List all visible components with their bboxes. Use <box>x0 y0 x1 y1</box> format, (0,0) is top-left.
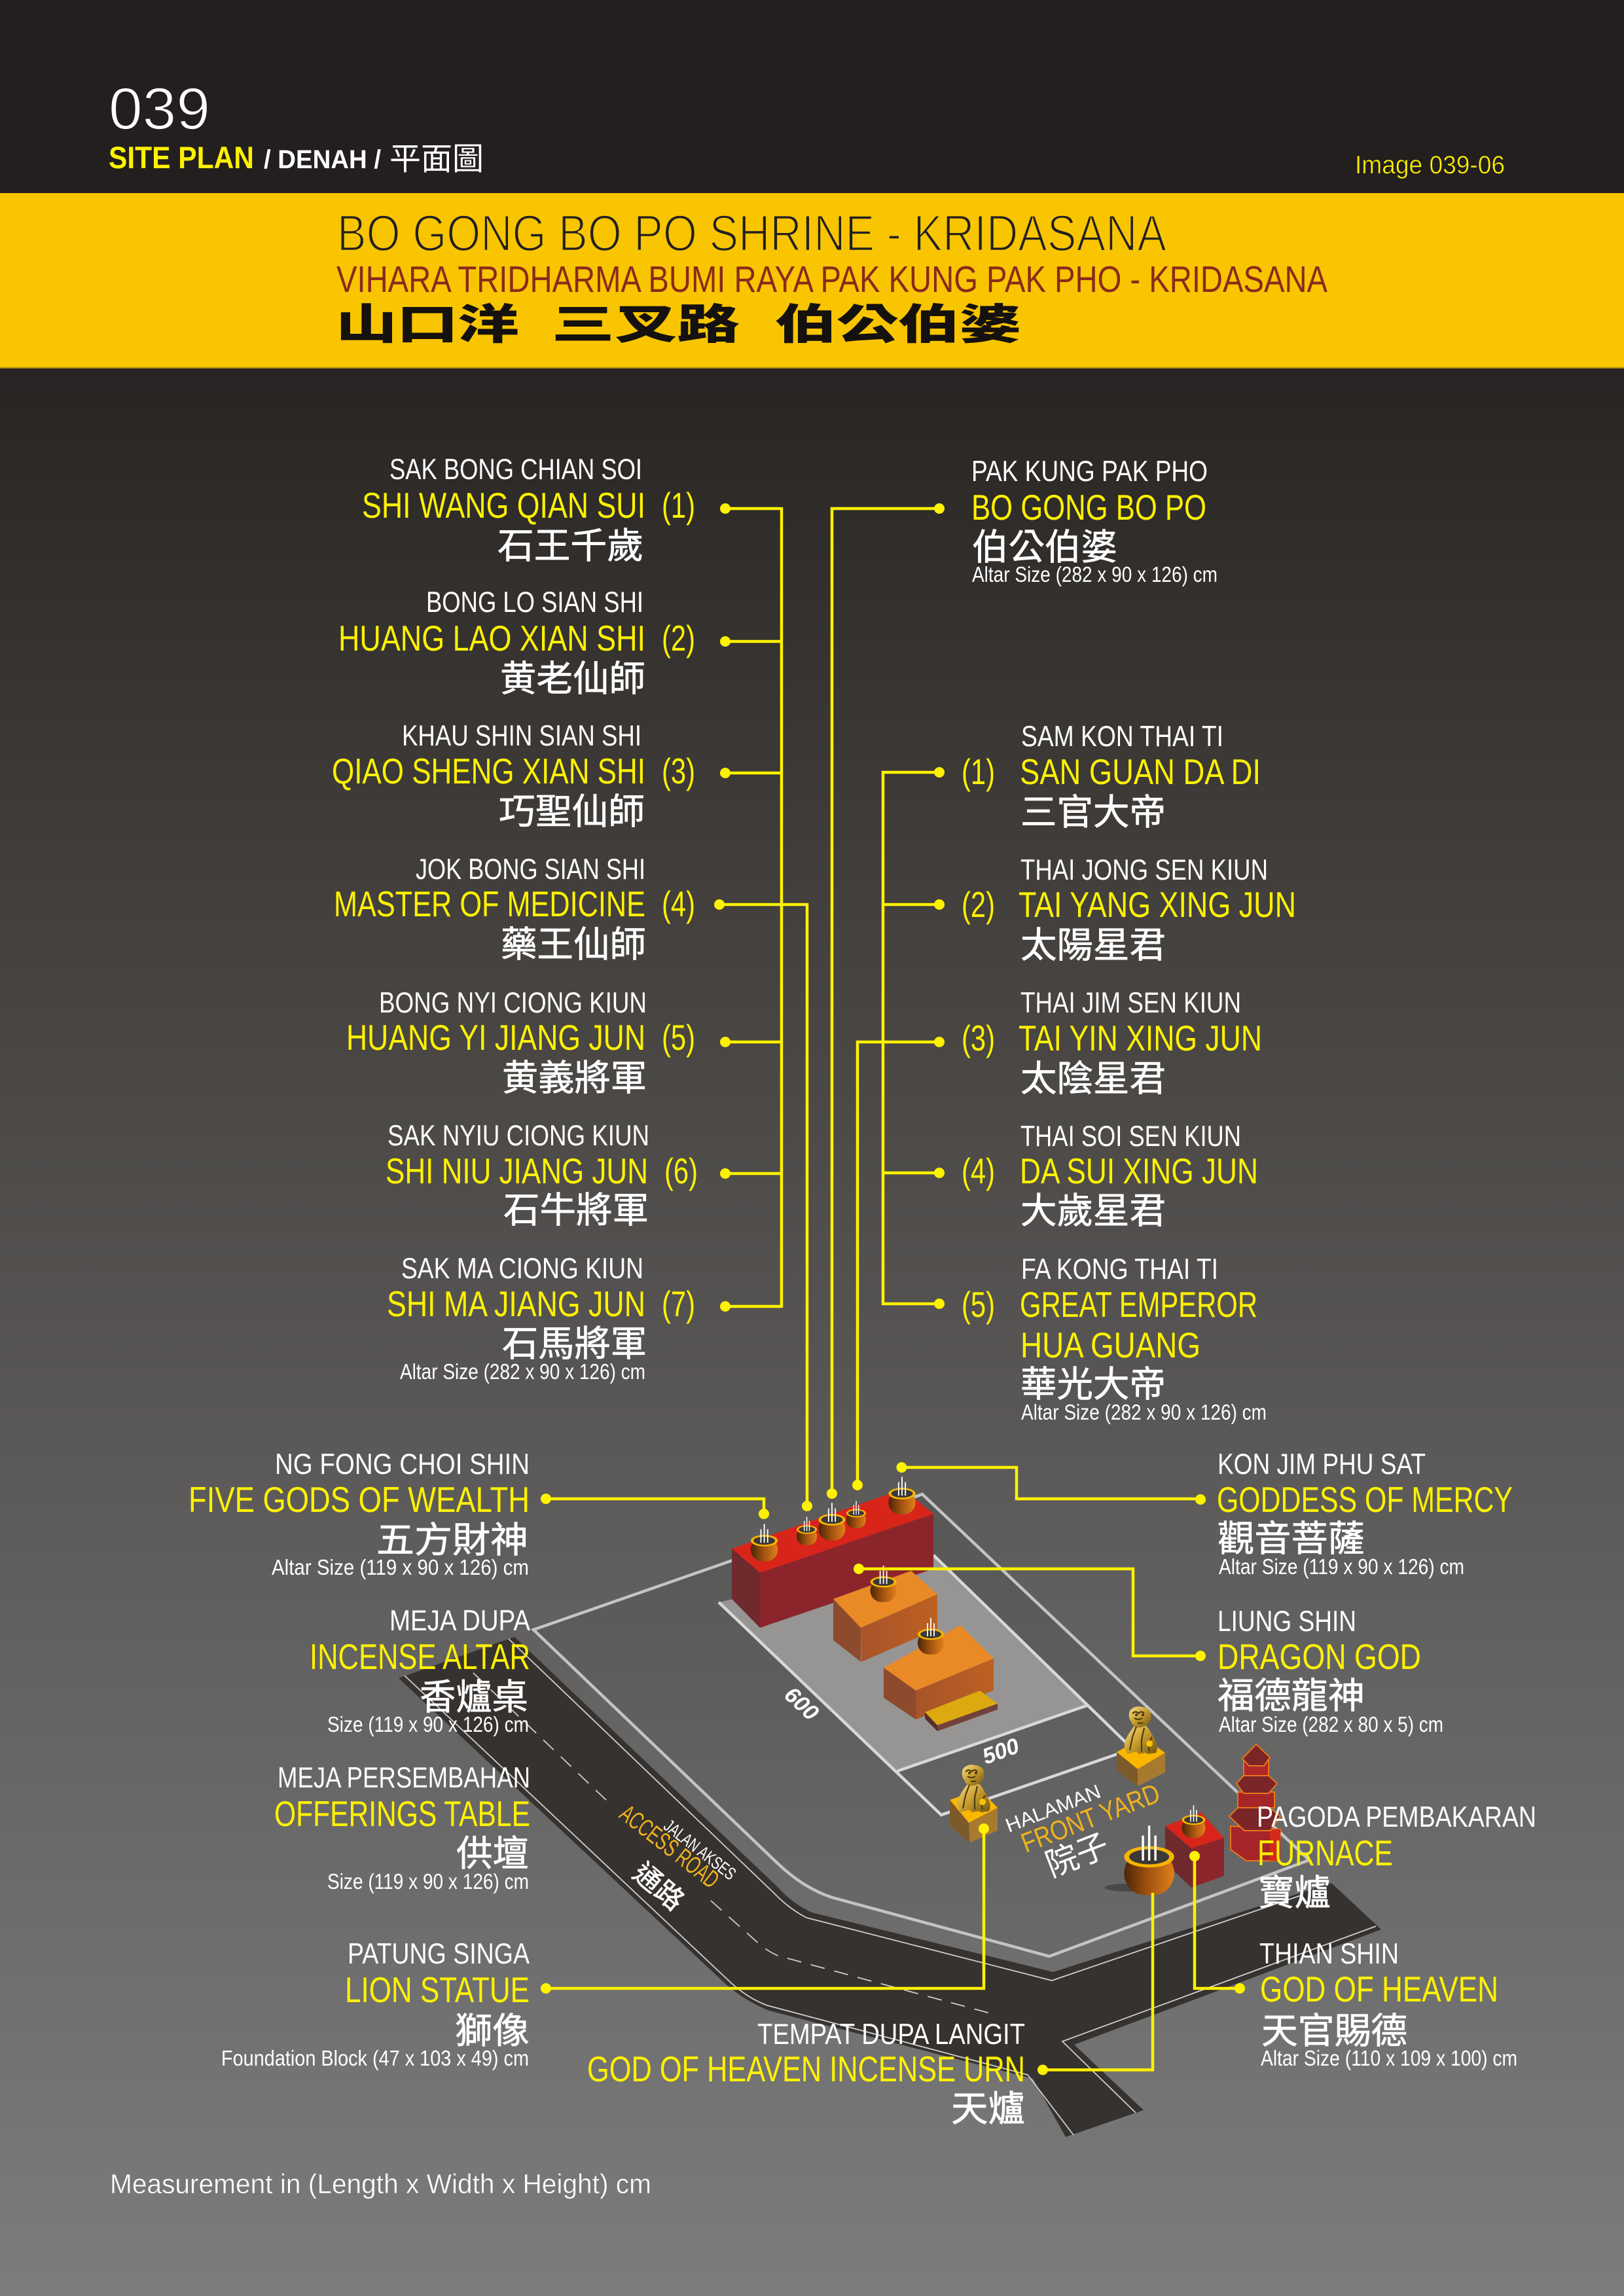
label: tai yin xing jun: TAI YIN XING JUN <box>1019 1018 1262 1058</box>
label: qiao sheng xian shi: QIAO SHENG XIAN SHI <box>332 751 645 791</box>
label: qiao sheng xian shi: KHAU SHIN SIAN SHI <box>402 720 641 752</box>
label: dragon god: DRAGON GOD <box>1218 1636 1421 1677</box>
label: huang yi jiang jun: (5) <box>662 1017 695 1058</box>
label: great emperor hua guang: (5) <box>962 1284 995 1325</box>
label: dragon god: Altar Size (282 x 80 x 5) cm <box>1219 1712 1443 1736</box>
access road <box>399 1637 1381 2137</box>
road labels: JALAN AKSES <box>660 1816 740 1884</box>
label: tai yang xing jun: (2) <box>962 884 995 925</box>
label: shi ma jiang jun: 石馬將軍 <box>502 1323 647 1364</box>
label: offerings table <box>274 1762 530 1893</box>
indonesian title: VIHARA TRIDHARMA BUMI RAYA PAK KUNG PAK PHO - KRIDASANA <box>336 259 1327 300</box>
label: shi ma jiang jun: SAK MA CIONG KIUN <box>401 1253 643 1285</box>
label: huang lao xian shi <box>338 586 695 699</box>
label: san guan da di: 三官大帝 <box>1020 792 1166 833</box>
lion statue left <box>950 1765 998 1842</box>
label: qiao sheng xian shi: (3) <box>662 751 695 791</box>
label: incense altar: Size (119 x 90 x 126) cm <box>327 1712 529 1736</box>
front yard label: FRONT YARD <box>1017 1778 1164 1858</box>
label: da sui xing jun: 大歲星君 <box>1020 1191 1166 1231</box>
god of heaven altar <box>1165 1805 1224 1888</box>
label: master of medicine: JOK BONG SIAN SHI <box>416 853 645 886</box>
label: shi ma jiang jun <box>387 1253 695 1384</box>
label: offerings table: 供壇 <box>456 1833 529 1874</box>
label: god of heaven <box>1259 1938 1517 2070</box>
label: qiao sheng xian shi <box>332 720 695 832</box>
label: god of heaven: GOD OF HEAVEN <box>1260 1969 1498 2009</box>
label: master of medicine <box>334 853 695 965</box>
shrine ground plate <box>533 1494 1309 1956</box>
label: tai yin xing jun: 太陰星君 <box>1020 1058 1166 1099</box>
measurement note: Measurement in (Length x Width x Height) cm <box>110 2168 651 2199</box>
chinese title <box>336 301 1021 348</box>
label: da sui xing jun <box>962 1121 1258 1231</box>
label: shi wang qian sui: SHI WANG QIAN SUI <box>362 485 645 526</box>
label: lion statue <box>221 1938 530 2070</box>
label: god of heaven: Altar Size (110 x 109 x 100) cm <box>1261 2046 1517 2070</box>
label: great emperor hua guang: GREAT EMPEROR <box>1020 1284 1257 1325</box>
incense altar <box>833 1566 937 1662</box>
label: offerings table: MEJA PERSEMBAHAN <box>278 1762 530 1794</box>
label: shi niu jiang jun: SHI NIU JIANG JUN <box>386 1151 648 1191</box>
inner hall floor <box>719 1555 1089 1771</box>
label: goddess of mercy <box>1217 1448 1513 1579</box>
label: incense altar <box>310 1605 530 1736</box>
road labels: ACCESS ROAD <box>614 1800 724 1894</box>
label: tai yang xing jun: THAI JONG SEN KIUN <box>1020 854 1268 886</box>
label: furnace: 寶爐 <box>1258 1873 1331 1913</box>
label: tai yang xing jun <box>962 854 1296 965</box>
pagoda furnace <box>1229 1744 1280 1861</box>
label: tai yang xing jun: 太陽星君 <box>1020 925 1166 965</box>
front yard label <box>1003 1778 1164 1884</box>
label: five gods of wealth: FIVE GODS OF WEALTH <box>189 1479 530 1520</box>
label: master of medicine: 藥王仙師 <box>501 924 646 965</box>
label: shi niu jiang jun: 石牛將軍 <box>503 1190 649 1230</box>
label: five gods of wealth: NG FONG CHOI SHIN <box>275 1448 530 1480</box>
label: qiao sheng xian shi: 巧聖仙師 <box>499 791 645 832</box>
chinese title: 山口洋 <box>336 301 519 348</box>
label: shi wang qian sui: (1) <box>662 485 695 526</box>
section title: 平面圖 <box>389 142 484 177</box>
label: god of heaven: THIAN SHIN <box>1259 1938 1399 1970</box>
altar urns <box>751 1477 916 1562</box>
label: great emperor hua guang: 華光大帝 <box>1020 1364 1166 1405</box>
label: offerings table: Size (119 x 90 x 126) cm <box>327 1869 529 1893</box>
label: huang lao xian shi: 黄老仙師 <box>500 658 645 699</box>
label: san guan da di: SAN GUAN DA DI <box>1020 751 1261 792</box>
label: tai yin xing jun: THAI JIM SEN KIUN <box>1020 987 1241 1019</box>
label: da sui xing jun: DA SUI XING JUN <box>1020 1151 1258 1191</box>
label: shi wang qian sui: 石王千歲 <box>497 526 643 566</box>
dimension labels: 500 <box>979 1733 1022 1770</box>
label: great emperor hua guang <box>962 1253 1267 1424</box>
label: god of heaven incense urn: TEMPAT DUPA LANGIT <box>757 2018 1025 2051</box>
label: furnace <box>1257 1801 1536 1913</box>
label: san guan da di: (1) <box>962 751 995 792</box>
road labels: 通路 <box>627 1857 690 1916</box>
label: master of medicine: (4) <box>662 884 695 924</box>
label: dragon god: 福德龍神 <box>1218 1676 1365 1716</box>
main red altar <box>732 1477 933 1628</box>
section title: SITE PLAN <box>109 140 254 175</box>
label: shi niu jiang jun: SAK NYIU CIONG KIUN <box>388 1120 649 1152</box>
label: great emperor hua guang: Altar Size (282 x 90 x 126) cm <box>1021 1400 1267 1424</box>
dimension labels: 600 <box>780 1682 823 1726</box>
chinese title: 伯公伯婆 <box>775 301 1021 348</box>
title banner <box>0 193 1624 368</box>
label: god of heaven incense urn: 天爐 <box>951 2089 1025 2129</box>
label: tai yang xing jun: TAI YANG XING JUN <box>1019 884 1296 925</box>
label: bo gong bo po: Altar Size (282 x 90 x 126) cm <box>972 562 1218 586</box>
front yard label: 院子 <box>1041 1827 1113 1884</box>
lion statue right <box>1117 1706 1165 1786</box>
label: tai yin xing jun: (3) <box>962 1018 995 1058</box>
label: lion statue: 獅像 <box>455 2011 530 2051</box>
label: tai yin xing jun <box>962 987 1262 1099</box>
label: incense altar: INCENSE ALTAR <box>310 1636 530 1677</box>
god of heaven incense urn <box>1105 1825 1174 1895</box>
label: bo gong bo po: PAK KUNG PAK PHO <box>971 456 1208 488</box>
section number: 039 <box>109 77 210 142</box>
section title <box>109 140 484 177</box>
label: huang lao xian shi: (2) <box>662 618 695 658</box>
label: da sui xing jun: THAI SOI SEN KIUN <box>1020 1121 1241 1153</box>
image number: Image 039-06 <box>1355 151 1505 179</box>
label: huang yi jiang jun: HUANG YI JIANG JUN <box>346 1017 645 1058</box>
section title: / DENAH / <box>264 145 381 174</box>
label: san guan da di <box>962 721 1261 833</box>
label: goddess of mercy: Altar Size (119 x 90 x 126) cm <box>1219 1554 1464 1579</box>
label: shi ma jiang jun: (7) <box>662 1283 695 1324</box>
dragon god step <box>925 1691 998 1731</box>
label: furnace: FURNACE <box>1257 1833 1393 1873</box>
label: great emperor hua guang: HUA GUANG <box>1020 1325 1200 1365</box>
label: bo gong bo po: 伯公伯婆 <box>972 527 1117 567</box>
label: lion statue: Foundation Block (47 x 103 x 49) cm <box>221 2046 529 2070</box>
label: dragon god: LIUNG SHIN <box>1218 1605 1356 1638</box>
label: huang lao xian shi: BONG LO SIAN SHI <box>426 586 643 619</box>
label: great emperor hua guang: FA KONG THAI TI <box>1021 1253 1218 1285</box>
label: god of heaven incense urn: GOD OF HEAVEN INCENSE URN <box>587 2049 1025 2089</box>
label: goddess of mercy: 觀音菩薩 <box>1218 1518 1365 1559</box>
label: god of heaven: 天官賜德 <box>1261 2011 1407 2051</box>
label: san guan da di: SAM KON THAI TI <box>1021 721 1223 753</box>
label: shi wang qian sui: SAK BONG CHIAN SOI <box>389 454 642 486</box>
road labels <box>614 1800 740 1916</box>
label: shi wang qian sui <box>362 454 695 566</box>
label: goddess of mercy: GODDESS OF MERCY <box>1217 1479 1513 1520</box>
label: bo gong bo po <box>971 456 1218 586</box>
header band <box>0 0 1624 193</box>
chinese title: 三叉路 <box>552 301 740 348</box>
label: incense altar: 香爐桌 <box>420 1677 528 1717</box>
label: huang lao xian shi: HUANG LAO XIAN SHI <box>338 618 645 658</box>
label: shi ma jiang jun: Altar Size (282 x 90 x 126) cm <box>400 1359 645 1384</box>
label: shi niu jiang jun: (6) <box>664 1151 698 1191</box>
label: huang yi jiang jun: BONG NYI CIONG KIUN <box>379 987 647 1019</box>
label: da sui xing jun: (4) <box>962 1151 995 1191</box>
label: furnace: PAGODA PEMBAKARAN <box>1257 1801 1536 1833</box>
leader lines <box>541 503 1245 2075</box>
offerings table <box>884 1618 994 1719</box>
front yard label: HALAMAN <box>1003 1781 1104 1837</box>
label: lion statue: LION STATUE <box>345 1969 530 2010</box>
label: offerings table: OFFERINGS TABLE <box>274 1793 530 1834</box>
dimension labels <box>780 1682 1022 1770</box>
label: shi ma jiang jun: SHI MA JIANG JUN <box>387 1283 645 1324</box>
label: huang yi jiang jun <box>346 987 695 1098</box>
label: shi niu jiang jun <box>386 1120 698 1230</box>
label: dragon god <box>1218 1605 1443 1736</box>
label: master of medicine: MASTER OF MEDICINE <box>334 884 645 924</box>
label: bo gong bo po: BO GONG BO PO <box>971 487 1206 528</box>
label: incense altar: MEJA DUPA <box>389 1605 530 1637</box>
english title: BO GONG BO PO SHRINE - KRIDASANA <box>337 204 1166 262</box>
label: five gods of wealth: 五方財神 <box>376 1520 528 1560</box>
label: goddess of mercy: KON JIM PHU SAT <box>1218 1448 1426 1480</box>
label: god of heaven incense urn <box>587 2018 1025 2129</box>
label: five gods of wealth <box>189 1448 530 1579</box>
label: huang yi jiang jun: 黄義將軍 <box>502 1058 647 1098</box>
label: lion statue: PATUNG SINGA <box>348 1938 530 1970</box>
label: five gods of wealth: Altar Size (119 x 90 x 126) cm <box>272 1555 529 1579</box>
